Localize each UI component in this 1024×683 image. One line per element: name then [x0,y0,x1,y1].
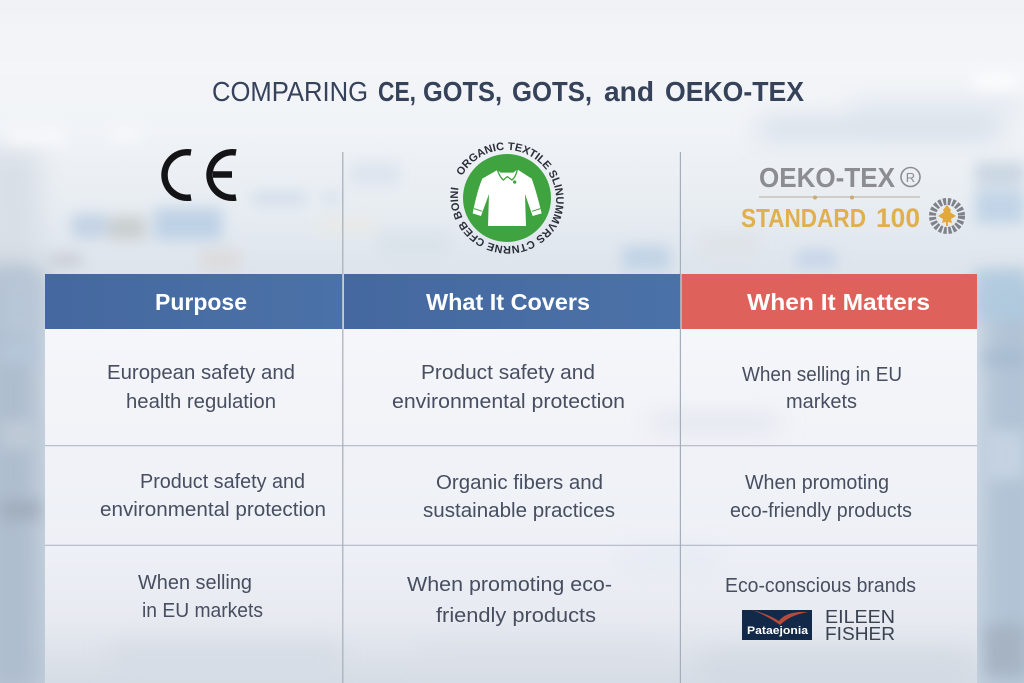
cell: row 2 when it matters [730,472,912,522]
cell: row 3 what it covers: When promoting eco- [407,574,612,596]
cell: row 3 purpose: When selling [138,572,252,594]
cell: row 3 purpose [138,572,263,622]
logo: Patagonia: Pataejonia [747,625,809,637]
cell: row 2 purpose [100,471,326,521]
logo: Eileen Fisher [825,607,895,644]
cell: row 3 when it matters [725,575,916,644]
cell: row 1 purpose: European safety and [107,362,295,384]
icon: OEKO-TEX Standard 100 logo: OEKO-TEX [759,162,895,193]
seal [932,202,962,230]
cell: row 1 purpose: health regulation [126,391,276,413]
header: When It Matters [682,274,977,329]
cell: row 2 when it matters: eco-friendly products [730,500,912,522]
header: When It Matters: When It Matters [747,289,930,315]
cell: row 2 when it matters: When promoting [745,472,889,494]
table body panel [45,329,977,683]
cell: row 2 purpose: environmental protection [100,499,326,521]
header: What It Covers: What It Covers [426,289,590,315]
title: GOTS, [512,76,592,107]
cell: row 1 when it matters: When selling in EU [742,364,902,386]
logo: Eileen Fisher: EILEEN [825,607,895,627]
icon: CE mark [165,152,236,198]
cell: row 1 when it matters [742,364,902,413]
icon: GOTS organic textile seal [450,142,564,254]
title: COMPARING [212,76,368,107]
icon: OEKO-TEX Standard 100 logo: R [906,170,915,185]
title: and [604,76,654,107]
title [212,76,804,107]
cell: row 1 purpose [107,362,295,413]
logo: Eileen Fisher: FISHER [825,624,895,644]
column dividers [343,152,680,683]
cell: row 2 what it covers [423,472,615,522]
cell: row 1 what it covers [392,362,625,413]
header: Purpose [45,274,342,329]
cell: row 3 what it covers [407,574,612,627]
cell: row 2 what it covers: sustainable practices [423,500,615,522]
cell: row 2 purpose: Product safety and [140,471,305,493]
title: GOTS, [423,76,502,107]
seal ring text: ORGANIC TEXTILE SLINUMMVRS CTNRNE CFEB BOINI [450,142,564,254]
logo: Patagonia [742,610,812,640]
cell: row 1 what it covers: Product safety and [421,362,595,384]
icon: OEKO-TEX Standard 100 logo: 100 [876,203,920,233]
cell: row 3 what it covers: friendly products [436,605,596,627]
cell: row 3 when it matters: Eco-conscious brands [725,575,916,597]
icon: OEKO-TEX Standard 100 logo [741,162,962,233]
title: CE, [378,76,416,107]
cell: row 2 what it covers: Organic fibers and [436,472,603,494]
title: OEKO-TEX [665,76,804,107]
cell: row 1 when it matters: markets [786,391,857,413]
icon: OEKO-TEX Standard 100 logo: STANDARD [741,203,866,233]
shirt [473,169,542,226]
header: What It Covers [344,274,680,329]
cell: row 1 what it covers: environmental protection [392,391,625,413]
cell: row 3 purpose: in EU markets [142,600,263,622]
header: Purpose: Purpose [155,289,247,315]
